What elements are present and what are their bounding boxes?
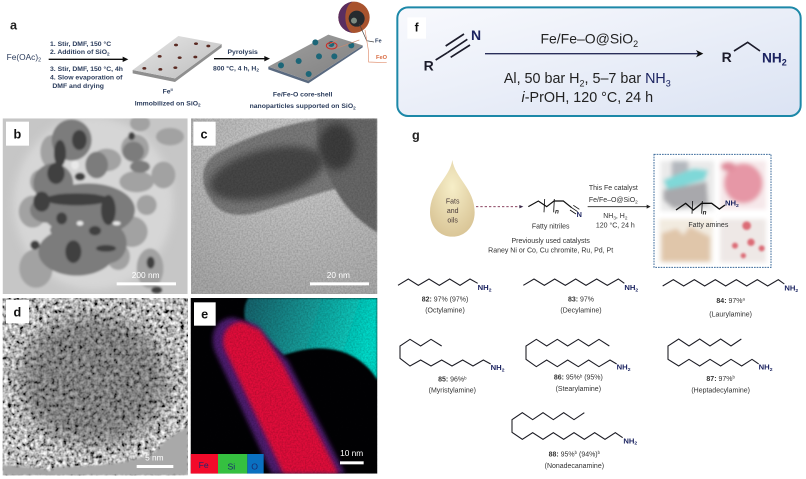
panel b: TEM micrograph: [3, 115, 188, 294]
compound 84: laurylamine: 84: 97%: [716, 298, 742, 305]
conditions below arrow: NH: [603, 213, 613, 220]
panel g label: g: [412, 129, 420, 143]
silica region: [244, 298, 377, 380]
caption: immobilized Fe: 2: [198, 103, 201, 108]
structure: nitrile: [424, 27, 481, 74]
conditions below arrow: [596, 213, 635, 229]
conditions above first arrow: [50, 40, 111, 56]
catalyst conditions above arrow: 2: [635, 199, 638, 204]
particle core: [18, 315, 168, 445]
caption: core-shell nanoparticles: [250, 91, 356, 110]
compound 84: laurylamine: a: [742, 297, 745, 302]
label: Fe and FeO callouts: [359, 24, 388, 63]
compound 85: myristylamine: 2: [502, 367, 505, 373]
conditions above first arrow: 1. Stir, DMF, 150 °C: [50, 40, 111, 48]
panel a label: a: [10, 18, 18, 32]
reaction conditions: [504, 71, 671, 106]
structure: primary amine: NH: [762, 50, 782, 65]
panel a: synthesis scheme: [7, 2, 388, 110]
panel c label: c: [200, 127, 208, 141]
compound 86: stearylamine: [526, 339, 631, 393]
compound 86: stearylamine: 86: 95%: [554, 375, 580, 382]
compound 86: stearylamine: (95%): [582, 375, 603, 382]
reaction conditions: i-PrOH, 120 °C, 24 h: [522, 90, 653, 106]
structure: fatty nitrile: n: [555, 209, 559, 216]
compound 83: decylamine: (Decylamine): [560, 308, 602, 315]
panel b label: [6, 122, 29, 146]
iron nanorod core: [223, 322, 338, 474]
plate: core-shell nanoparticles: [268, 35, 363, 83]
compound 87: heptadecylamine: 2: [770, 367, 773, 373]
starting material: Fe(OAc): [7, 52, 38, 62]
icon: core-shell particle: [328, 2, 370, 48]
carbon film corner: [43, 427, 188, 475]
structure: nitrile: N: [471, 27, 481, 43]
compound 87: heptadecylamine: NH: [759, 363, 770, 372]
starting material: 2: [38, 58, 41, 64]
compound 88: nonadecanamine: 2: [634, 441, 637, 447]
panel d label: d: [13, 305, 21, 319]
compound 85: myristylamine: (Myristylamine): [429, 387, 476, 394]
caption: previously used catalysts: Raney Ni or Co, Cu chromite, Ru, Pd, Pt: [488, 248, 613, 255]
caption: previously used catalysts: Previously used catalysts: [511, 238, 590, 245]
structure: nitrile: R: [424, 58, 434, 74]
structure: fatty amine: n: [703, 209, 707, 216]
compound 85: myristylamine: NH: [491, 363, 502, 372]
label: Fe and FeO callouts: Fe: [375, 38, 382, 44]
conditions above first arrow: 2. Addition of SiO: [50, 49, 107, 56]
catalyst above arrow: 2: [633, 39, 638, 49]
legend: elements: O: [251, 461, 258, 471]
icon: oil drop: and: [447, 208, 459, 215]
compound 86: stearylamine: b: [580, 373, 583, 378]
compound 87: heptadecylamine: (Heptadecylamine): [691, 387, 750, 394]
scale bar: 10 nm: [340, 448, 364, 464]
conditions below arrow: , H: [616, 213, 625, 220]
compound 82: octylamine: 2: [489, 287, 492, 293]
conditions below first arrow: 3. Stir, DMF, 150 °C, 4h: [50, 65, 123, 73]
compound 83: decylamine: 83: 97%: [568, 297, 594, 304]
catalyst conditions above arrow: [589, 185, 638, 204]
structure: fatty nitrile: N: [577, 210, 582, 219]
compound 82: octylamine: [398, 279, 492, 314]
texture: grain: [191, 118, 377, 294]
catalyst conditions above arrow: This Fe catalyst: [589, 185, 638, 192]
compound 86: stearylamine: 2: [628, 367, 631, 373]
compound 86: stearylamine: (Stearylamine): [556, 386, 601, 393]
caption: fatty nitriles: Fatty nitriles: [532, 223, 570, 230]
structure: fatty nitrile: [528, 199, 582, 219]
panel e label: e: [201, 307, 208, 321]
catalyst above arrow: Fe/Fe–O@SiO: [540, 30, 633, 46]
scale bar: 20 nm: 20 nm: [327, 270, 350, 280]
panel f label: [407, 17, 426, 39]
arrow: to fatty amines: [588, 205, 651, 209]
legend: elements: Si: [227, 461, 235, 471]
conditions above first arrow: 2: [107, 51, 110, 56]
compound 88: nonadecanamine: [512, 413, 637, 470]
caption: core-shell nanoparticles: 2: [353, 105, 356, 110]
caption: immobilized Fe: Immobilized on SiO: [135, 100, 198, 107]
amine product library: [398, 279, 798, 470]
compound 82: octylamine: 82: 97% (97%): [422, 296, 468, 303]
compound 85: myristylamine: [400, 339, 505, 394]
arrow: dashed to nitriles: [476, 205, 523, 208]
compound 87: heptadecylamine: [668, 339, 773, 394]
photo: textile: [661, 161, 714, 211]
compound 85: myristylamine: 85: 96%: [438, 377, 464, 384]
pyrolysis conditions: [213, 49, 259, 73]
conditions below arrow: 3: [613, 215, 616, 220]
icon: oil drop: oils: [447, 218, 458, 225]
icon: oil drop: Fats: [446, 198, 460, 205]
caption: immobilized Fe: Fe: [163, 88, 171, 95]
scale bar: 5 nm: 5 nm: [145, 452, 164, 462]
caption: immobilized Fe: II: [171, 87, 173, 92]
pyrolysis conditions: 2: [256, 68, 259, 73]
scale bar: 10 nm: 10 nm: [340, 448, 363, 458]
photo: pink pellets: [720, 161, 766, 209]
structure: primary amine: R: [722, 49, 732, 65]
pyrolysis conditions: 800 °C, 4 h, H: [213, 65, 256, 72]
pyrolysis conditions: Pyrolysis: [227, 49, 258, 56]
panel f: nitrile reduction scheme: [397, 7, 801, 116]
panel d: HRTEM micrograph: [3, 298, 188, 475]
reaction conditions: NH: [645, 71, 671, 89]
panel c label: [193, 122, 216, 146]
conditions below first arrow: [50, 65, 123, 90]
legend: elements: [191, 454, 264, 474]
compound 87: heptadecylamine: 87: 97%: [706, 376, 732, 383]
conditions below arrow: 2: [625, 215, 628, 220]
reaction conditions: , 5–7 bar: [585, 71, 645, 87]
panel f label: f: [415, 21, 420, 35]
structure: primary amine: [722, 42, 787, 67]
panel: fatty amine applications: [654, 154, 771, 267]
compound 84: laurylamine: (Laurylamine): [709, 311, 752, 318]
compound 82: octylamine: NH: [478, 283, 489, 292]
photo: tan liquid: [659, 219, 713, 262]
compound 85: myristylamine: b: [464, 375, 467, 380]
panel g: fatty amine scheme: [412, 129, 771, 267]
scale bar: 5 nm: [136, 454, 174, 468]
compound 82: octylamine: (Octylamine): [425, 307, 465, 314]
compound 83: decylamine: [523, 279, 638, 315]
particle cluster: [13, 115, 184, 293]
conditions below first arrow: DMF and drying: [52, 83, 104, 90]
silica support particle: [316, 118, 377, 233]
compound 84: laurylamine: NH: [784, 284, 795, 293]
compound 83: decylamine: 2: [635, 287, 638, 293]
reaction conditions: Al, 50 bar H: [504, 71, 580, 87]
reaction conditions: 3: [666, 79, 671, 89]
caption: core-shell nanoparticles: Fe/Fe-O core-shell: [273, 91, 333, 98]
structure: fatty amine: 2: [736, 203, 739, 209]
compound 88: nonadecanamine: (94%): [577, 451, 598, 458]
compound 88: nonadecanamine: (Nonadecanamine): [545, 463, 604, 470]
texture: grain: [191, 298, 377, 474]
arrow: reaction: [485, 50, 703, 57]
panel e: elemental map: [191, 298, 377, 474]
structure: fatty amine: [676, 198, 739, 216]
caption: core-shell nanoparticles: nanoparticles supported on SiO: [250, 103, 353, 110]
panel c: TEM micrograph: [191, 118, 377, 294]
reaction conditions: 2: [580, 79, 585, 89]
structure: primary amine: 2: [782, 57, 787, 67]
iron nanorod halo: [213, 317, 345, 474]
compound 83: decylamine: NH: [624, 283, 635, 292]
caption: fatty amines: Fatty amines: [688, 222, 729, 229]
compound 87: heptadecylamine: b: [732, 375, 735, 380]
nanorod: [203, 119, 337, 215]
legend: elements: Fe: [199, 460, 209, 470]
compound 88: nonadecanamine: b: [598, 450, 601, 455]
structure: fatty amine: NH: [725, 198, 736, 207]
compound 84: laurylamine: [663, 280, 798, 318]
conditions below first arrow: 4. Slow evaporation of: [50, 74, 123, 81]
arrow: pyrolysis: [214, 56, 270, 61]
compound 84: laurylamine: 2: [795, 288, 798, 294]
caption: previously used catalysts: [488, 238, 613, 255]
scale bar: 200 nm: 200 nm: [132, 270, 160, 280]
compound 88: nonadecanamine: b: [575, 450, 578, 455]
conditions below arrow: 120 °C, 24 h: [596, 221, 635, 229]
compound 88: nonadecanamine: NH: [623, 436, 634, 445]
plate: immobilized Fe: [133, 36, 222, 82]
panel f frame: [397, 7, 801, 116]
icon: oil drop: [430, 160, 475, 237]
catalyst conditions above arrow: Fe/Fe–O@SiO: [589, 197, 635, 204]
photo: pink tablets: [720, 219, 766, 262]
arrow: first step: [49, 57, 128, 62]
panel b label: b: [13, 127, 21, 141]
compound 88: nonadecanamine: 88: 95%: [549, 451, 575, 458]
scale bar: 20 nm: [310, 272, 369, 286]
panel e label: [194, 302, 216, 326]
panel d label: [6, 300, 29, 323]
caption: immobilized Fe: [135, 87, 201, 108]
label: Fe and FeO callouts: FeO: [376, 55, 388, 61]
scale bar: 200 nm: [116, 272, 176, 286]
compound 86: stearylamine: NH: [617, 363, 628, 372]
